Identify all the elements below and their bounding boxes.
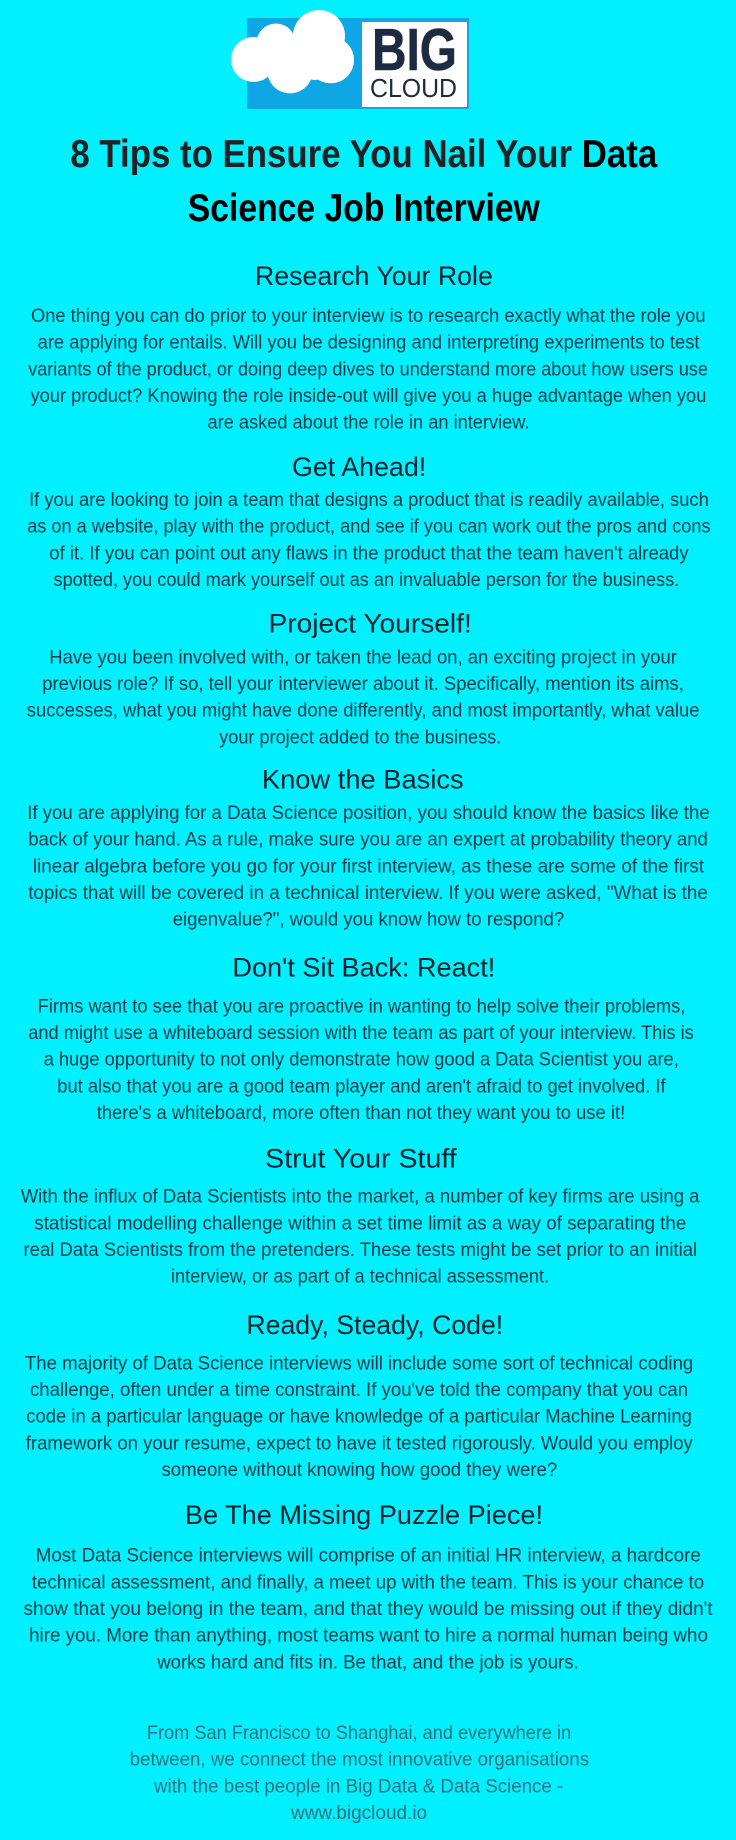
text block: tip 3: previous role? If so, tell your interviewer about it. Specifically, mention its aims, [42,673,684,695]
title: 8 Tips to Ensure You Nail Your Data [70,133,657,176]
panel: tip 6 [21,1143,700,1288]
text block: tip 5: but also that you are a good team player and aren't afraid to get involved. If [57,1075,666,1097]
text block: tip 5 [28,995,694,1124]
text block: tip 8 [24,1545,713,1673]
text block: tip 3: successes, what you might have done differently, and most importantly, what value [27,700,700,722]
footer text: From San Francisco to Shanghai, and everywhere in [147,1722,571,1744]
text block: tip 8: Most Data Science interviews will comprise of an initial HR interview, a hardcore [36,1545,701,1567]
text block: tip 4 [27,802,710,931]
text block: tip 6 [21,1186,700,1288]
text block: tip 2: of it. If you can point out any flaws in the product that the team haven't already [49,542,689,564]
text block: tip 5: Firms want to see that you are proactive in wanting to help solve their problems, [38,995,685,1017]
text block: tip 7: The majority of Data Science interviews will include some sort of technical coding [25,1352,693,1374]
heading: Research Your Role: Research Your Role [255,261,493,291]
text block: tip 2 [27,489,711,591]
text block: tip 6: interview, or as part of a technical assessment. [171,1266,549,1288]
logo wordmark [370,17,457,103]
text block: tip 1: your product? Knowing the role inside-out will give you a huge advantage when you [30,385,706,407]
footer text: www.bigcloud.io [290,1802,427,1824]
text block: tip 1: are asked about the role in an interview. [208,412,530,434]
text block: tip 2: spotted, you could mark yourself out as an invaluable person for the business. [54,569,679,591]
text block: tip 4: back of your hand. As a rule, make sure you are an expert at probability theory and [28,829,708,851]
heading: Project Yourself!: Project Yourself! [268,609,472,639]
heading: Know the Basics: Know the Basics [262,764,464,794]
footer text: between, we connect the most innovative organisations [130,1749,589,1771]
heading: Don't Sit Back: React!: Don't Sit Back: React! [232,953,495,983]
heading: Ready, Steady, Code!: Ready, Steady, Code! [246,1310,503,1340]
text block: tip 8: works hard and fits in. Be that, and the job is yours. [156,1651,579,1673]
footer text: with the best people in Big Data & Data Science - [153,1775,563,1797]
text block: tip 5: and might use a whiteboard session with the team as part of your interview. This is [28,1022,694,1044]
text block: tip 8: technical assessment, and finally, a meet up with the team. This is your chance to [32,1571,704,1593]
logo wordmark: BIG [372,17,457,83]
text block: tip 1: One thing you can do prior to your interview is to research exactly what the role you [31,305,706,327]
text block: tip 6: statistical modelling challenge within a set time limit as a way of separating the [34,1212,686,1234]
text block: tip 4: eigenvalue?", would you know how to respond? [173,909,564,931]
text block: tip 4: If you are applying for a Data Science position, you should know the basics like the [27,802,710,824]
icon: cloud [231,10,354,93]
panel: tip 8 [24,1500,713,1673]
text block: tip 7: challenge, often under a time constraint. If you've told the company that you can [30,1379,688,1401]
text block: tip 3 [27,646,700,748]
text block: tip 3: your project added to the business. [219,726,501,748]
text block: tip 8: show that you belong in the team, and that they would be missing out if they didn't [24,1598,713,1620]
heading: Get Ahead!: Get Ahead! [292,452,426,482]
panel: tip 2 [27,452,711,591]
text block: tip 5: a huge opportunity to not only demonstrate how good a Data Scientist you are, [44,1049,679,1071]
title [70,133,657,230]
logo wordmark: CLOUD [370,73,457,103]
text block: tip 4: topics that will be covered in a technical interview. If you were asked, "What is the [28,882,708,904]
panel: tip 5 [28,953,694,1124]
panel: tip 4 [27,764,710,931]
text block: tip 8: hire you. More than anything, most teams want to hire a normal human being who [29,1625,708,1647]
text block: tip 6: real Data Scientists from the pretenders. These tests might be set prior to an initial [24,1239,697,1261]
text block: tip 6: With the influx of Data Scientists into the market, a number of key firms are using a [21,1186,700,1208]
text block: tip 4: linear algebra before you go for your first interview, as these are some of the first [33,855,705,877]
text block: tip 1: are applying for entails. Will you be designing and interpreting experiments to test [38,332,700,354]
text block: tip 1 [28,305,708,434]
panel: tip 7 [25,1310,693,1481]
footer text [130,1722,589,1824]
text block: tip 7 [25,1352,693,1481]
title: Science Job Interview [188,187,540,230]
panel: tip 1 [28,261,708,434]
text block: tip 2: If you are looking to join a team that designs a product that is readily available, such [29,489,709,511]
text block: tip 5: there's a whiteboard, more often than not they want you to use it! [97,1102,625,1124]
heading: Be The Missing Puzzle Piece!: Be The Missing Puzzle Piece! [185,1500,543,1530]
text block: tip 3: Have you been involved with, or taken the lead on, an exciting project in your [49,646,677,668]
text block: tip 7: code in a particular language or have knowledge of a particular Machine Learning [26,1406,692,1428]
logo: Big Cloud [231,10,469,109]
panel: tip 3 [27,609,700,748]
text block: tip 7: someone without knowing how good they were? [162,1459,557,1481]
text block: tip 7: framework on your resume, expect to have it tested rigorously. Would you employ [26,1432,693,1454]
heading: Strut Your Stuff: Strut Your Stuff [265,1143,457,1173]
